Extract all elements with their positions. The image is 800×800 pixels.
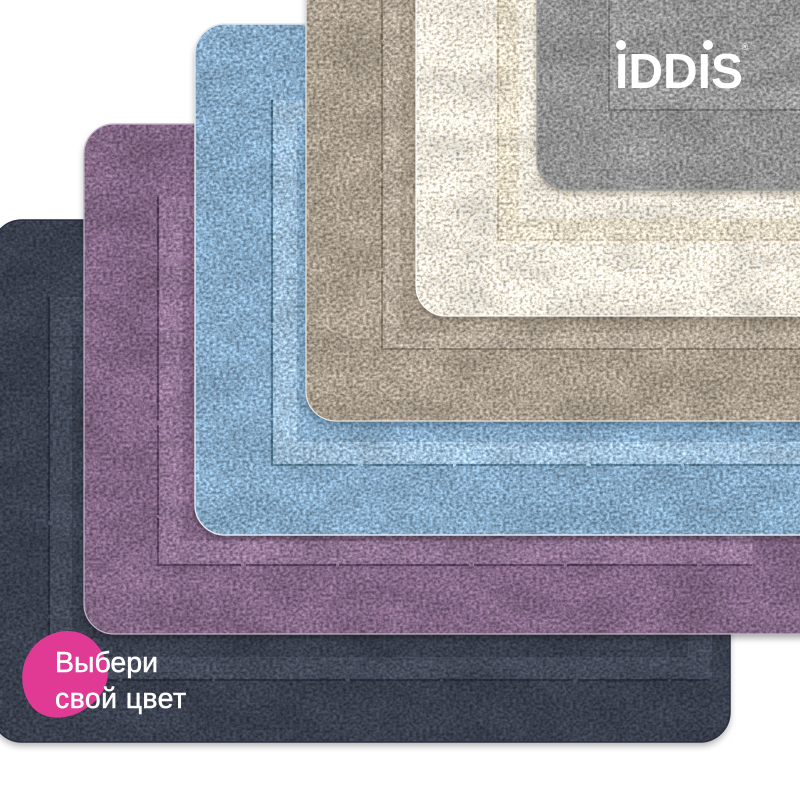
rug: navy [0,220,730,746]
caption [55,647,186,715]
rug: blue [195,24,800,539]
rug: purple [84,124,800,638]
caption: Выбери [55,647,158,679]
rug: cream [416,0,800,320]
pink blob badge [22,631,108,718]
caption: свой цвет [55,683,186,715]
logo: IDDIS: IDDIS [615,45,743,99]
rug: taupe [306,0,800,426]
rug: grey [537,0,800,194]
logo: IDDIS: ® [742,42,749,52]
